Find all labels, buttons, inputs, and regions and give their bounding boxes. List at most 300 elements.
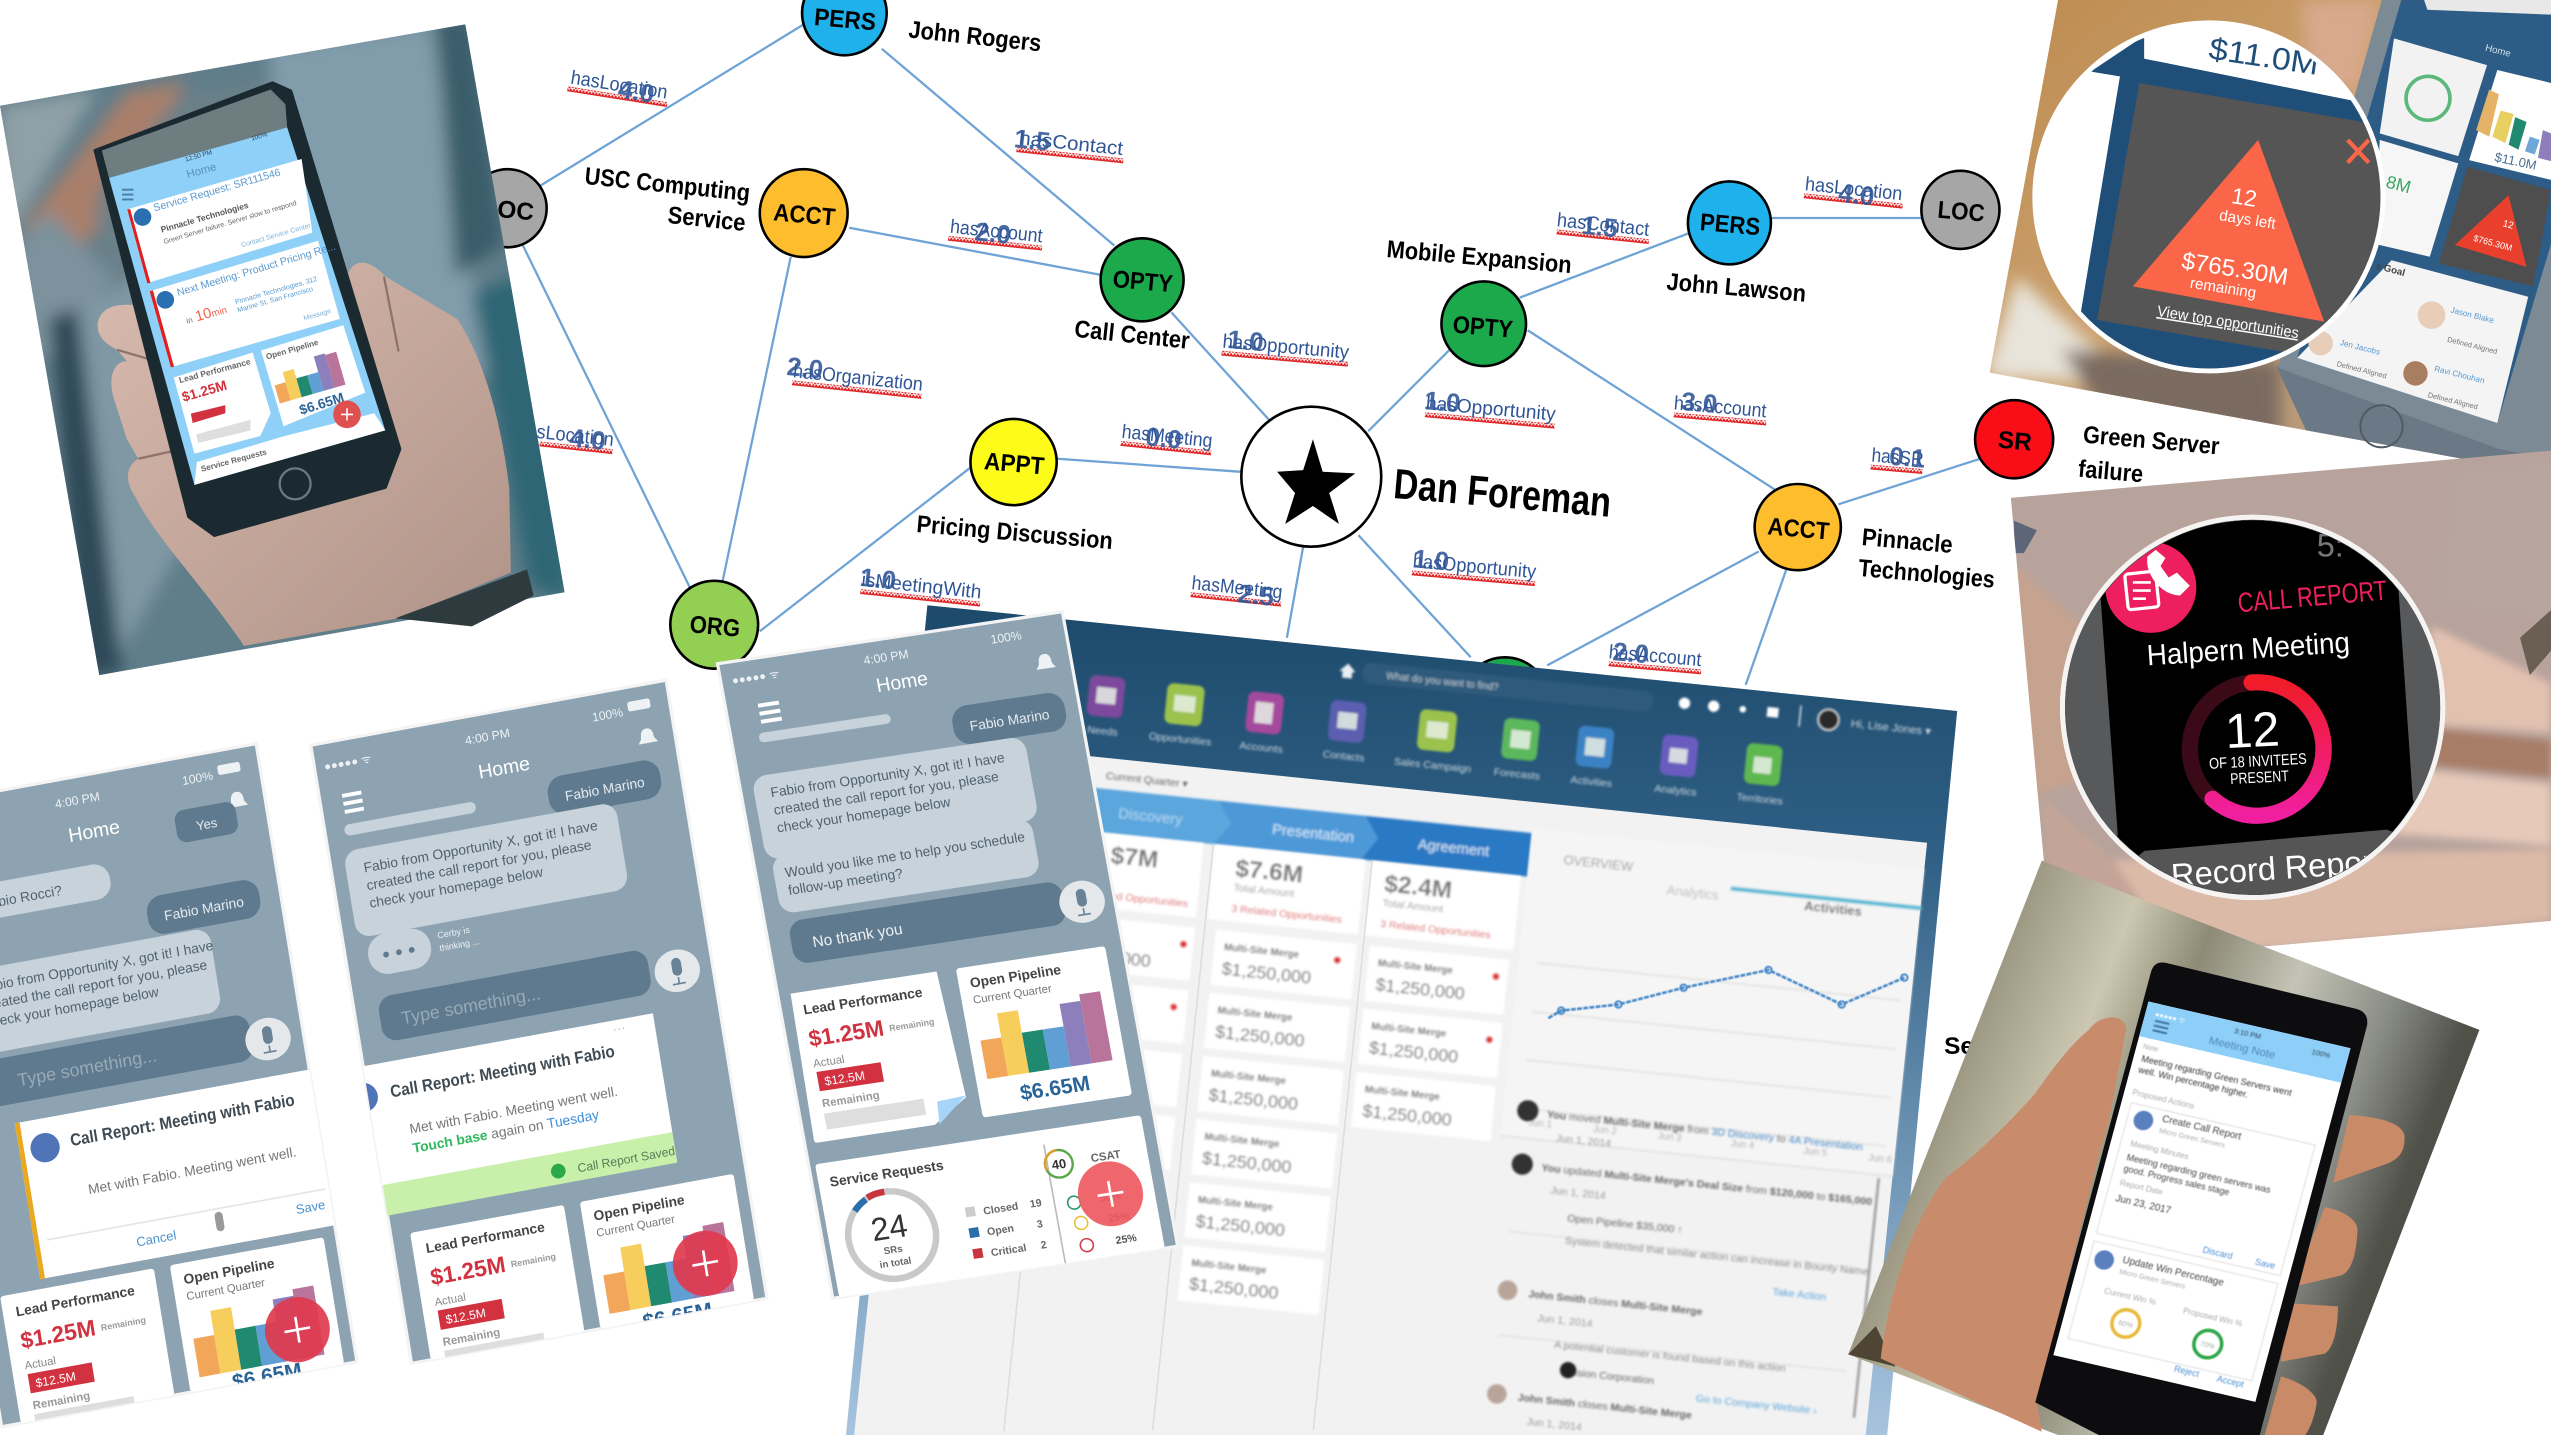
CSAT: 25% bbox=[1115, 1232, 1138, 1247]
edge labels: 1.0 bbox=[1226, 324, 1265, 357]
edge labels: hasMeeting bbox=[1121, 421, 1214, 452]
icon: mic bbox=[1056, 878, 1108, 926]
edge labels: 4.0 bbox=[1837, 178, 1876, 212]
triangle callout: 12 bbox=[2230, 182, 2259, 212]
lead performance card bbox=[787, 971, 970, 1143]
open pipeline card: Open Pipeline bbox=[182, 1255, 276, 1287]
open pipeline card bbox=[170, 1237, 346, 1402]
callout circle: $11.0M bbox=[2207, 31, 2321, 82]
photo: hand holding phone, top left bbox=[0, 16, 569, 683]
edge labels: hasOpportunity bbox=[1222, 331, 1350, 364]
progress ring: OF 18 INVITEES bbox=[2209, 751, 2307, 773]
menu icon bbox=[342, 791, 364, 814]
edge labels: hasLocation bbox=[1804, 173, 1903, 205]
node labels: Dan Foreman bbox=[1392, 460, 1613, 526]
open pipeline card: Open Pipeline bbox=[968, 961, 1062, 991]
activity feed: System detected that similar action can increase in Bounty Name bbox=[1564, 1235, 1869, 1278]
call report card bbox=[344, 1013, 677, 1219]
open pipeline card: Current Quarter bbox=[186, 1277, 266, 1303]
open pipeline card: Current Quarter bbox=[972, 983, 1053, 1007]
node labels: Pinnacle bbox=[1861, 524, 1954, 559]
panel: overview chart: Jun 5 bbox=[1803, 1146, 1828, 1159]
screen header: Home bbox=[185, 161, 218, 181]
node labels: Technologies bbox=[1857, 555, 1996, 594]
card: next meeting: Pinnacle Technologies, 312 bbox=[235, 276, 318, 306]
type bar: Type something... bbox=[16, 1045, 158, 1090]
lead performance card: Lead Performance bbox=[15, 1282, 136, 1320]
type bar bbox=[377, 948, 653, 1043]
open pipeline card: $6.65M bbox=[1018, 1072, 1092, 1105]
node: APPT bbox=[970, 419, 1057, 505]
card: update win percentage: Proposed Win % bbox=[2182, 1306, 2243, 1329]
card: next meeting: Message bbox=[303, 308, 332, 322]
call report card: Save bbox=[295, 1197, 326, 1217]
toolbar labels: Accounts bbox=[1239, 740, 1283, 756]
sales stage chevrons bbox=[1052, 784, 1532, 877]
edge labels: 2.0 bbox=[973, 216, 1012, 250]
reply bar: No thank you bbox=[811, 921, 904, 951]
toolbar labels: Needs bbox=[1087, 724, 1118, 739]
pipeline columns: $1,250,000 bbox=[1061, 942, 1152, 971]
legend: Closed bbox=[982, 1200, 1019, 1218]
node labels: John Rogers bbox=[907, 17, 1043, 57]
line chart bbox=[1548, 967, 1908, 1018]
call report card: Cancel bbox=[135, 1227, 177, 1250]
sales stage chevrons: Discovery bbox=[1118, 806, 1184, 829]
type bar bbox=[0, 1013, 255, 1109]
lead performance card: Lead Performance bbox=[802, 984, 924, 1018]
tablet bbox=[2278, 0, 2551, 459]
callout circle bbox=[2017, 0, 2408, 390]
tablet: s Goal bbox=[2375, 261, 2406, 279]
card: next meeting: in bbox=[185, 315, 194, 326]
card: create call report: Create Call Report bbox=[2161, 1114, 2243, 1143]
card: service request: Service Request: SR111546 bbox=[152, 167, 282, 214]
add button bbox=[264, 1297, 330, 1362]
edge labels: 0.0 bbox=[1144, 421, 1183, 455]
node: LOC right bbox=[1921, 171, 1999, 249]
card: next meeting bbox=[150, 241, 340, 367]
tablet: Jen Jacobs bbox=[2339, 338, 2381, 357]
status bar bbox=[731, 624, 1057, 718]
card: lead performance bbox=[174, 353, 271, 454]
icon: close bbox=[2348, 140, 2369, 163]
panel: chat screen A bbox=[0, 744, 359, 1436]
pipeline columns bbox=[1004, 827, 1521, 1331]
open pipeline card: Open Pipeline bbox=[592, 1191, 686, 1224]
edge labels: 2.0 bbox=[786, 351, 825, 385]
chat bubbles: check your homepage below bbox=[368, 863, 545, 911]
chat bubbles bbox=[0, 799, 277, 1059]
toolbar labels: Opportunities bbox=[1148, 730, 1212, 749]
photo: tablet with opportunity callout bbox=[1985, 0, 2551, 480]
chat bubbles: Fabio Marino bbox=[968, 706, 1051, 734]
watch face: Halpern Meeting bbox=[2146, 626, 2351, 672]
edge labels: 3.0 bbox=[1680, 386, 1719, 419]
panel: desktop dashboard content bbox=[1004, 659, 1932, 1433]
card: update win percentage: Current Win % bbox=[2103, 1287, 2157, 1307]
card: create call report: Micro Green Servers bbox=[2158, 1126, 2227, 1150]
node labels: Pricing Discussion bbox=[915, 511, 1114, 555]
phone glass bbox=[102, 89, 287, 178]
phone screen: Note bbox=[2142, 1042, 2159, 1054]
legend: 2 bbox=[1040, 1239, 1048, 1252]
legend: 19 bbox=[1029, 1197, 1043, 1211]
pipeline columns: Multi-Site Merge bbox=[1204, 1131, 1280, 1150]
chat bubbles: follow-up meeting? bbox=[787, 865, 904, 898]
panel: overview chart bbox=[1501, 828, 1926, 1176]
node: ACCT USC bbox=[760, 169, 848, 257]
card: next meeting: Next Meeting: Product Pricing Re... bbox=[176, 241, 337, 299]
tablet: $11.0M bbox=[2493, 149, 2538, 173]
user controls: Hi, Lise Jones ▾ bbox=[1850, 718, 1932, 738]
panel: overview chart: Jun 4 bbox=[1730, 1138, 1755, 1152]
node: OPTY Mobile Expansion: OPTY bbox=[1452, 312, 1514, 344]
chat bubbles bbox=[744, 691, 1094, 915]
card: service request: Pinnacle Technologies bbox=[160, 200, 250, 235]
legend: Open bbox=[986, 1223, 1015, 1238]
sales stage chevrons: Agreement bbox=[1417, 837, 1490, 860]
edge labels: 1.0 bbox=[1412, 543, 1450, 576]
toolbar icons bbox=[1086, 674, 1783, 787]
phone body bbox=[95, 83, 400, 535]
screen header bbox=[122, 131, 269, 200]
toolbar labels: Territories bbox=[1736, 791, 1783, 808]
lead performance card: $1.25M bbox=[806, 1015, 886, 1052]
edge labels: hasLocation bbox=[515, 419, 615, 451]
panel: overview chart: OVERVIEW bbox=[1563, 852, 1635, 874]
search bar: What do you want to find? bbox=[1386, 671, 1500, 694]
triangle callout: $765.30M bbox=[2180, 247, 2290, 290]
chat bubbles: Yes bbox=[195, 815, 219, 833]
chat bubbles: Fabio Marino bbox=[163, 893, 245, 924]
chat bubbles: check your homepage below bbox=[775, 793, 952, 835]
card: create call report: Jun 23, 2017 bbox=[2114, 1193, 2172, 1216]
edge labels: hasOpportunity bbox=[1412, 550, 1537, 583]
lead performance card: $12.5M bbox=[445, 1306, 487, 1327]
chat bubbles bbox=[345, 760, 662, 974]
lead performance card bbox=[410, 1205, 584, 1360]
add button bbox=[668, 1225, 742, 1301]
photo background bbox=[0, 16, 569, 683]
card: update win percentage: Reject bbox=[2173, 1364, 2201, 1379]
donut chart: SRs bbox=[883, 1244, 904, 1257]
pipeline columns: $1,250,000 bbox=[1188, 1274, 1279, 1303]
pipeline columns: Multi-Site Merge bbox=[1210, 1068, 1287, 1087]
edge labels: hasAccount bbox=[1673, 392, 1768, 422]
card: update win percentage: Accept bbox=[2216, 1373, 2246, 1389]
panel: overview chart: Jun 1 bbox=[1528, 1118, 1552, 1131]
activity feed: Jun 1, 2014 bbox=[1555, 1133, 1612, 1150]
node labels: Mobile Expansion bbox=[1386, 236, 1573, 279]
phone screen: Meeting Note bbox=[2207, 1035, 2276, 1062]
edge labels: hasOrganization bbox=[792, 360, 924, 396]
screen header: 12:50 PM bbox=[184, 149, 213, 164]
node: OPTY Call Center bbox=[1101, 238, 1184, 321]
card: service requests bbox=[194, 413, 385, 485]
card: service request: Contact Service Center bbox=[240, 222, 312, 249]
photo background bbox=[1985, 0, 2551, 480]
open pipeline card: $6.65M bbox=[231, 1359, 304, 1394]
watch face: CALL REPORT bbox=[2236, 574, 2388, 618]
lead performance card: Remaining bbox=[32, 1390, 91, 1412]
pipeline columns: $1,250,000 bbox=[1195, 1211, 1286, 1240]
phone screen: 3:10 PM bbox=[2233, 1026, 2262, 1041]
chat bubbles: created the call report for you, please bbox=[772, 768, 1000, 818]
lead performance card: Remaining bbox=[888, 1017, 935, 1033]
edge labels: 1.0 bbox=[859, 562, 898, 595]
pipeline columns: $1,250,000 bbox=[1214, 1022, 1305, 1051]
edge labels: hasOpportunity bbox=[1425, 392, 1557, 426]
triangle callout bbox=[2133, 140, 2324, 342]
edge labels: hasAccount bbox=[1608, 641, 1703, 671]
screen header: 100% bbox=[250, 131, 269, 143]
node: LOC right: LOC bbox=[1936, 197, 1986, 228]
icon: mic bbox=[245, 1018, 291, 1060]
phone screen bbox=[109, 127, 385, 485]
call report card: Touch base again on Tuesday bbox=[411, 1106, 600, 1156]
toolbar labels: Forecasts bbox=[1493, 766, 1541, 783]
pipeline columns: 3 Related Opportunities bbox=[1077, 887, 1189, 910]
edge labels: isMeetingWith bbox=[860, 569, 982, 603]
call report card: Call Report: Meeting with Fabio bbox=[69, 1090, 296, 1150]
edge labels: 4.0 bbox=[568, 422, 607, 456]
card: next meeting: Marine St, San Francisco bbox=[237, 286, 314, 314]
watch face: Record Report bbox=[2170, 843, 2383, 894]
chat bubbles: Would you like me to help you schedule bbox=[784, 828, 1026, 880]
card: next meeting: 10min bbox=[194, 301, 229, 325]
legend bbox=[965, 1196, 1050, 1262]
lead performance card: Actual bbox=[434, 1292, 467, 1309]
status bar: ●●●●● ᯤ bbox=[731, 669, 781, 687]
status bar: 4:00 PM bbox=[464, 726, 511, 748]
status bar: ●●●●● ᯤ bbox=[323, 753, 372, 774]
panel: overview chart: Jun 2 bbox=[1592, 1124, 1617, 1138]
node: hidden OPTY bbox=[1461, 657, 1549, 745]
lead performance card: Remaining bbox=[442, 1327, 501, 1349]
status bar: 100% bbox=[591, 705, 624, 725]
chat bubbles: Fabio from Opportunity X, got it! I have bbox=[769, 749, 1006, 800]
chat bubbles: Fabio from Opportunity X, got it! I have bbox=[362, 817, 599, 876]
pipeline columns: Total Amount bbox=[1382, 897, 1444, 915]
edge labels bbox=[515, 66, 1927, 674]
pipeline columns: Multi-Site Merge bbox=[1364, 1084, 1441, 1103]
status bar: Home bbox=[875, 668, 930, 697]
activity feed: Vision Corporation bbox=[1567, 1366, 1655, 1387]
card: lead performance: Lead Performance bbox=[178, 356, 252, 385]
tablet: Defined Aligned bbox=[2446, 335, 2498, 356]
pipeline columns: $7M bbox=[1109, 842, 1159, 874]
phone screen: Proposed Actions bbox=[2131, 1088, 2195, 1111]
edge labels: hasLocation bbox=[569, 67, 669, 104]
node labels: Service bbox=[666, 202, 747, 237]
card: service request bbox=[127, 159, 312, 283]
call report card: Met with Fabio. Meeting went well. bbox=[87, 1143, 297, 1197]
status bar: Home bbox=[67, 816, 121, 847]
panel: overview chart: Analytics bbox=[1666, 882, 1720, 903]
donut chart: in total bbox=[879, 1255, 913, 1271]
edge labels: hasMeeting bbox=[1191, 572, 1284, 604]
pipeline columns: Total Amount bbox=[1233, 882, 1295, 900]
node: OPTY Mobile Expansion bbox=[1441, 281, 1526, 366]
status bar: 4:00 PM bbox=[862, 647, 910, 668]
finger creases bbox=[117, 277, 399, 459]
activity feed: Jun 1, 2014 bbox=[1550, 1184, 1606, 1202]
photo background bbox=[1848, 861, 2479, 1435]
node: PERS John Lawson bbox=[1688, 181, 1771, 264]
card: create call report: Discard bbox=[2202, 1245, 2234, 1261]
win gauges: 60% bbox=[2117, 1318, 2134, 1330]
win gauges bbox=[2108, 1307, 2225, 1361]
activity feed: Open Pipeline $35,000 ↑ bbox=[1567, 1212, 1683, 1236]
node: PERS John Rogers bbox=[802, 0, 887, 55]
edge labels: 1.5 bbox=[1580, 210, 1619, 243]
CSAT: CSAT bbox=[1090, 1149, 1122, 1165]
node: ACCT USC: ACCT bbox=[772, 199, 836, 232]
activity feed: Jun 1, 2014 bbox=[1537, 1312, 1593, 1330]
knowledge graph bbox=[469, 0, 2221, 1060]
open pipeline card: Current Quarter bbox=[596, 1214, 676, 1240]
tablet: Home bbox=[2484, 43, 2512, 60]
tablet: Defined Aligned bbox=[2427, 390, 2479, 411]
phone screen: 100% bbox=[2311, 1047, 2332, 1060]
type bar: Type something... bbox=[400, 983, 542, 1028]
node: PERS John Rogers: PERS bbox=[813, 4, 877, 36]
donut chart: 24 bbox=[868, 1207, 910, 1248]
card: open pipeline: Open Pipeline bbox=[265, 338, 320, 361]
activity feed: Take Action bbox=[1772, 1286, 1827, 1303]
add button bbox=[333, 401, 361, 428]
tablet: Jason Blake bbox=[2450, 306, 2495, 325]
pipeline columns: $1,250,000 bbox=[1221, 958, 1312, 988]
node labels: Green Server bbox=[2082, 422, 2221, 460]
chat bubbles: Fabio Marino bbox=[564, 774, 646, 804]
status bar: 4:00 PM bbox=[54, 789, 101, 811]
pipeline columns: $2.4M bbox=[1383, 870, 1453, 904]
lead performance card: $1.25M bbox=[428, 1251, 507, 1290]
node: LOC left: LOC bbox=[481, 195, 535, 226]
panel: desktop dashboard frame bbox=[846, 605, 1957, 1435]
reply bar bbox=[787, 880, 1068, 965]
activity feed: Go to Company Website › bbox=[1695, 1392, 1818, 1417]
card: update win percentage: Update Win Percentage bbox=[2121, 1255, 2225, 1289]
chat bubbles: thinking ... bbox=[439, 936, 480, 953]
node labels bbox=[583, 17, 2221, 1060]
edge labels: hasContact bbox=[1556, 209, 1651, 241]
icon: mic bbox=[654, 950, 700, 992]
activity feed bbox=[1475, 1098, 1896, 1422]
tablet: Ravi Chouhan bbox=[2433, 364, 2486, 385]
CSAT: 25% bbox=[1107, 1210, 1131, 1225]
pipeline columns: $1,250,000 bbox=[1362, 1101, 1453, 1130]
pipeline columns: Multi-Site Merge bbox=[1223, 942, 1300, 961]
open pipeline card bbox=[580, 1174, 756, 1342]
progress ring: 12 bbox=[2224, 702, 2281, 759]
edge labels: hasAccount bbox=[949, 216, 1044, 247]
toolbar labels: Contacts bbox=[1322, 748, 1365, 765]
card: open pipeline bbox=[261, 325, 365, 426]
status bar: 100% bbox=[181, 769, 214, 788]
progress ring bbox=[2190, 682, 2324, 816]
activity feed: You updated Multi-Site Merge's Deal Size from $120,000 to $165,000 bbox=[1541, 1162, 1873, 1208]
pipeline columns: $1,250,000 bbox=[1375, 974, 1466, 1003]
pipeline columns: 3 Related Opportunities bbox=[1231, 903, 1342, 926]
call report card: Call Report Saved bbox=[577, 1144, 676, 1175]
card: lead performance: $1.25M bbox=[180, 377, 229, 405]
card: create call report: Save bbox=[2254, 1257, 2276, 1271]
panel: dashboard content background bbox=[854, 739, 1927, 1435]
status bar bbox=[325, 698, 658, 778]
node: PERS John Lawson: PERS bbox=[1699, 209, 1761, 241]
tablet: 12 bbox=[2501, 218, 2515, 232]
home button bbox=[280, 468, 311, 499]
edge labels: 1.0 bbox=[1423, 385, 1462, 418]
hand bbox=[1848, 1017, 2405, 1435]
edge labels: hasContact bbox=[1018, 127, 1125, 160]
watch face: 5: bbox=[2317, 527, 2344, 563]
lead performance card: Lead Performance bbox=[424, 1219, 546, 1256]
CSAT: 50% bbox=[1099, 1190, 1122, 1205]
card: create call report: Meeting regarding green servers was bbox=[2126, 1152, 2272, 1195]
watch face bbox=[2062, 488, 2443, 911]
pipeline columns: Multi-Site Merge bbox=[1191, 1258, 1267, 1276]
call report card bbox=[15, 1070, 335, 1279]
node labels: USC Computing bbox=[583, 163, 751, 207]
call report card: ··· bbox=[611, 1020, 627, 1037]
service requests card bbox=[815, 1115, 1165, 1297]
chat bubbles: Cerby is bbox=[437, 925, 471, 940]
filter row: Current Quarter ▾ bbox=[1105, 770, 1189, 791]
status bar: Home bbox=[477, 753, 531, 784]
card: create call report: good. Progress sales stage bbox=[2123, 1163, 2231, 1197]
phone screen bbox=[2053, 1002, 2351, 1402]
lead performance card: Actual bbox=[812, 1054, 846, 1070]
service requests card: Service Requests bbox=[828, 1157, 945, 1190]
activity feed: A potential customer is found based on this action bbox=[1554, 1338, 1786, 1374]
photo: hand holding phone, bottom right bbox=[1848, 861, 2479, 1435]
toolbar labels: Analytics bbox=[1654, 783, 1697, 799]
panel: overview chart: Jun 6 bbox=[1868, 1153, 1892, 1166]
pipeline columns: Multi-Site Merge bbox=[1377, 958, 1454, 977]
node: APPT: APPT bbox=[983, 448, 1045, 480]
node: ACCT Pinnacle: ACCT bbox=[1766, 513, 1830, 546]
legend: 3 bbox=[1036, 1218, 1044, 1231]
node: SR bbox=[1975, 400, 2053, 478]
call report card: Call Report: Meeting with Fabio bbox=[389, 1042, 616, 1101]
CSAT: 40 bbox=[1050, 1156, 1067, 1173]
card: update win percentage: Micro Green Servers bbox=[2119, 1267, 2187, 1291]
pipeline columns: $1,250,000 bbox=[1201, 1148, 1292, 1177]
toolbar labels: Activities bbox=[1570, 774, 1613, 790]
card: open pipeline: $6.65M bbox=[297, 389, 346, 418]
lead performance card: $12.5M bbox=[35, 1369, 77, 1390]
CSAT bbox=[1043, 1141, 1138, 1256]
tablet: 8M bbox=[2384, 172, 2413, 197]
edge labels: 4.0 bbox=[616, 74, 657, 109]
icon: call report bbox=[2105, 542, 2196, 633]
node: LOC left bbox=[469, 169, 547, 247]
triangle callout: days left bbox=[2218, 207, 2278, 233]
edge labels: 2.5 bbox=[1236, 578, 1276, 612]
activity feed: You moved Multi-Site Merge from 3D Discovery to 4A Presentation bbox=[1546, 1109, 1864, 1153]
menu icon bbox=[758, 701, 782, 724]
triangle callout: remaining bbox=[2189, 275, 2257, 302]
photo: smartwatch call report bbox=[2001, 439, 2551, 976]
activity item: last entry: John Smith closes Multi-Site Merge bbox=[1517, 1392, 1692, 1422]
phone screen: Meeting regarding Green Servers went bbox=[2140, 1054, 2293, 1098]
open pipeline card bbox=[956, 946, 1132, 1118]
progress ring: PRESENT bbox=[2230, 768, 2290, 788]
